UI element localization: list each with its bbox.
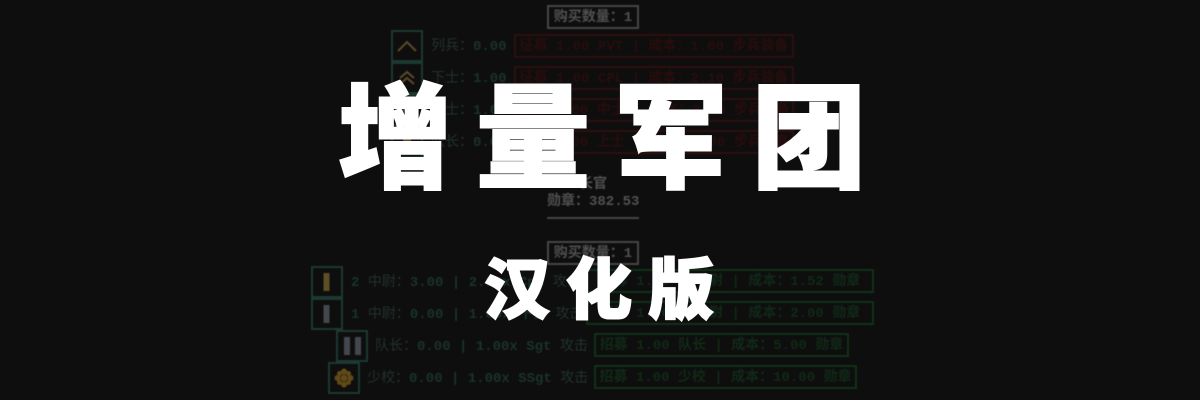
second lieutenant count: 2 中尉：3.00 | 2.50x Cpl 攻击 — [351, 275, 581, 291]
first lieutenant count: 1 中尉：0.00 | 1.00x 下士 攻击 — [351, 307, 583, 323]
subtitle: 汉化版 — [484, 237, 730, 333]
icon: private rank chevron — [391, 30, 423, 62]
title: 增量军团 — [338, 47, 890, 212]
squad leader count: 队长：0.00 — [431, 135, 507, 151]
recruit major button — [594, 365, 857, 389]
icon: staff sergeant rank — [391, 126, 423, 158]
recruit first lieutenant button — [586, 301, 874, 325]
private count: 列兵：0.00 — [431, 39, 507, 55]
recruit captain button — [594, 333, 849, 357]
recruit second lieutenant button — [586, 269, 874, 293]
top purchase quantity box — [547, 5, 639, 29]
recruit second lieutenant button: 招募 1.00 2 中尉 | 成本：1.52 勋章 — [600, 274, 860, 290]
recruit sergeant button — [514, 98, 794, 122]
officer heading: 长官 — [579, 177, 607, 193]
recruit staff sergeant button: 征募 1.00 上士 | 成本：5.00 步兵装备 — [518, 135, 790, 151]
icon: captain double bars — [336, 330, 368, 362]
icon: corporal rank chevron — [391, 62, 423, 94]
captain count: 队长：0.00 | 1.00x Sgt 攻击 — [375, 339, 588, 355]
recruit private button: 征募 1.00 PVT | 成本：1.00 步兵装备 — [520, 39, 788, 55]
recruit staff sergeant button — [514, 130, 794, 154]
recruit corporal button: 征募 1.00 CPL | 成本：2.10 步兵装备 — [520, 71, 788, 87]
icon: major gold oak leaf — [328, 362, 360, 394]
bottom purchase quantity box: 购买数量：1 — [554, 246, 632, 262]
icon: sergeant rank — [391, 94, 423, 126]
recruit major button: 招募 1.00 少校 | 成本：10.00 勋章 — [599, 370, 852, 386]
sergeant count: 中士：1.00 — [431, 103, 507, 119]
major count: 少校：0.00 | 1.00x SSgt 攻击 — [367, 371, 588, 387]
icon: silver lieutenant bar — [311, 298, 343, 330]
recruit sergeant button: 征募 1.00 中士 | 成本：3.00 步兵装备 — [518, 103, 790, 119]
recruit first lieutenant button: 招募 1.00 1 中尉 | 成本：2.00 勋章 — [600, 306, 860, 322]
recruit private button — [514, 34, 794, 58]
bottom purchase quantity box — [547, 241, 639, 265]
icon: gold lieutenant bar — [311, 266, 343, 298]
top purchase quantity box: 购买数量：1 — [554, 10, 632, 26]
corporal count: 下士：1.00 — [431, 71, 507, 87]
recruit captain button: 招募 1.00 队长 | 成本：5.00 勋章 — [600, 338, 843, 354]
recruit corporal button — [514, 66, 794, 90]
medal count: 勋章：382.53 — [547, 194, 639, 210]
divider line — [547, 217, 639, 219]
